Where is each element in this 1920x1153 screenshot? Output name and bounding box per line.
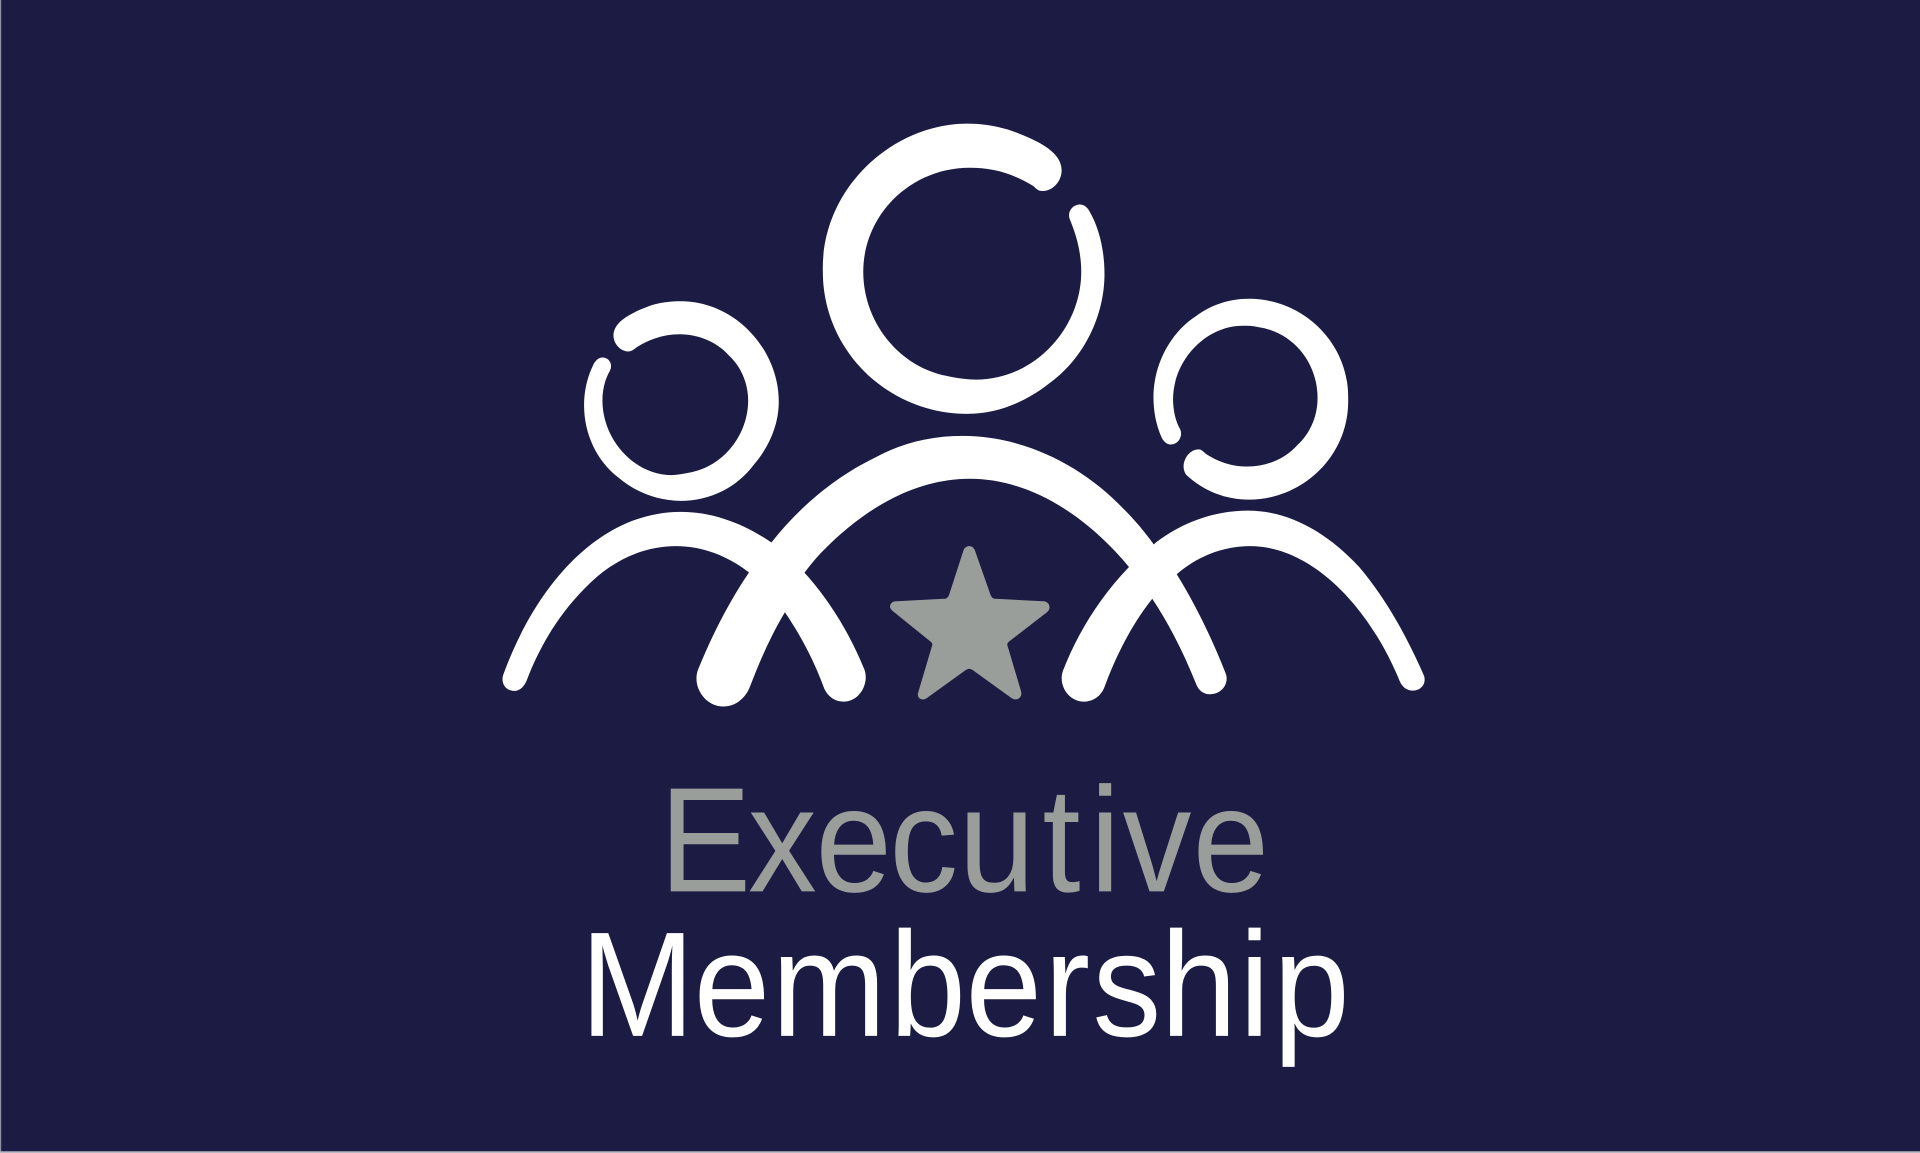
icon: executive membership group [503,124,1425,707]
icon: centre person head [823,124,1104,414]
icon: right person head [1153,299,1348,500]
icon: right person shoulders [1062,511,1425,702]
icon: centre person left arm strap [748,542,866,702]
icon: left person shoulders [503,512,784,691]
icon: left person head [584,301,779,501]
icon: star [890,546,1050,699]
heading: Executive: Executive [659,757,1269,924]
icon: centre person shoulders [696,436,1227,707]
heading: Membership: Membership [580,902,1350,1068]
